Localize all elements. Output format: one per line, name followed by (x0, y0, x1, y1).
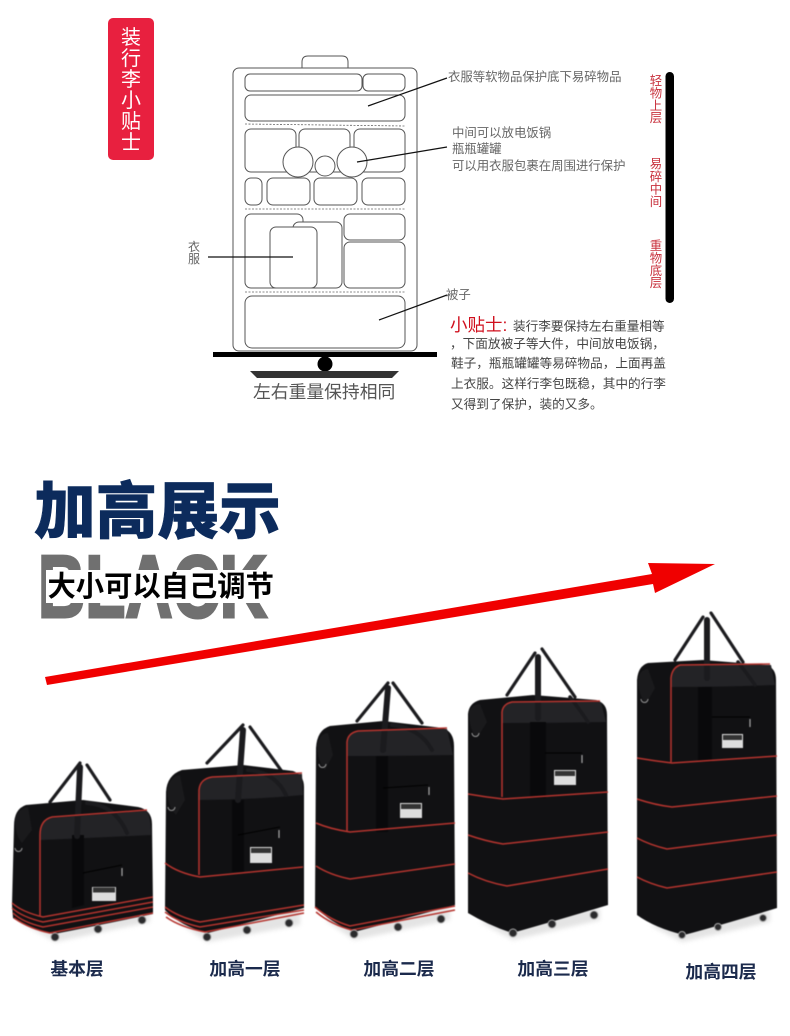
label: level two: 加高二层 (363, 958, 435, 979)
callout: soft items (368, 69, 621, 106)
layer scale: 间 (650, 195, 662, 209)
diagram: packed suitcase (233, 56, 417, 351)
balance beam and pivot (213, 352, 437, 378)
bag: two levels added (315, 683, 455, 940)
layer scale: 物 (650, 252, 662, 266)
text block: tips: 装行李要保持左右重量相等 (513, 318, 665, 334)
callout: clothes (188, 239, 293, 266)
layer scale: 轻 (650, 74, 662, 88)
layer scale: 重 (650, 239, 662, 253)
badge: packing tips: 李 (121, 68, 141, 91)
bag: four levels added (637, 613, 777, 942)
bag: one level added (165, 725, 304, 942)
callout: fragile items: 中间可以放电饭锅 (452, 125, 551, 140)
layer scale: 中 (650, 182, 662, 196)
layer scale: 上 (650, 99, 662, 113)
badge: packing tips: 行 (121, 47, 141, 70)
text block: tips: 小贴士: (450, 315, 507, 335)
callout: clothes: 衣 (188, 239, 200, 254)
bag: three levels added (468, 649, 608, 940)
label: base level: 基本层 (50, 959, 104, 979)
subheading with BLACK backdrop: 大小可以自己调节 (48, 570, 274, 602)
badge: packing tips (108, 18, 154, 160)
layer scale: 物 (650, 86, 662, 100)
layer scale: 易 (650, 157, 662, 171)
bag: base level (12, 763, 153, 942)
text block: tips: 又得到了保护，装的又多。 (451, 396, 603, 412)
callout: soft items: 衣服等软物品保护底下易碎物品 (448, 69, 621, 84)
layer scale: 碎 (650, 169, 662, 184)
callout: fragile items (357, 125, 625, 173)
callout: fragile items: 瓶瓶罐罐 (452, 142, 502, 156)
callout: fragile items: 可以用衣服包裹在周围进行保护 (452, 158, 625, 173)
text block: tips: 鞋子，瓶瓶罐罐等易碎物品，上面再盖 (451, 356, 666, 370)
text block: tips (450, 315, 666, 412)
label: level one: 加高一层 (209, 958, 281, 979)
heading: 加高展示 (34, 478, 281, 547)
label: level four: 加高四层 (685, 961, 757, 982)
layer scale: 层 (650, 276, 662, 290)
label: level three: 加高三层 (517, 958, 589, 979)
layer scale: 层 (650, 111, 662, 125)
arrow (45, 563, 715, 685)
callout: clothes: 服 (188, 252, 200, 266)
badge: packing tips: 士 (121, 131, 141, 154)
callout: quilt (379, 288, 471, 320)
badge: packing tips: 装 (121, 26, 141, 49)
caption: balance: 左右重量保持相同 (253, 382, 395, 402)
layer scale: 底 (650, 263, 662, 278)
badge: packing tips: 小 (121, 89, 141, 112)
text block: tips: 上衣服。这样行李包既稳，其中的行李 (451, 376, 666, 391)
subheading with BLACK backdrop: BLACK (38, 537, 267, 636)
badge: packing tips: 贴 (121, 110, 141, 133)
text block: tips: ，下面放被子等大件，中间放电饭锅， (450, 336, 665, 351)
callout: quilt: 被子 (446, 288, 471, 302)
layer scale (650, 72, 674, 303)
